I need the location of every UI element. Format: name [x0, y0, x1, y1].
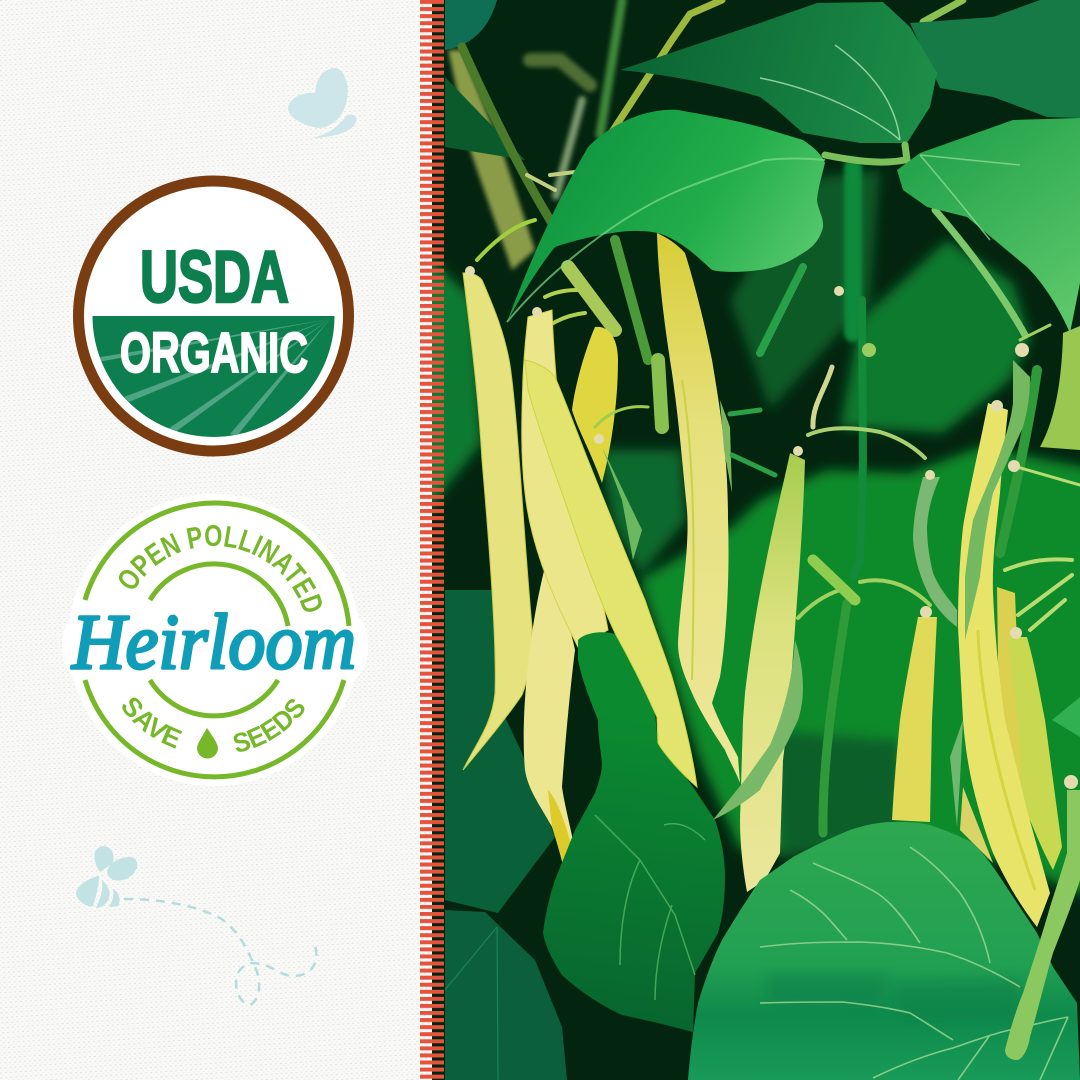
bean: back top — [572, 327, 618, 483]
pod: thin green centre — [602, 447, 642, 560]
leaf: central lower — [543, 632, 725, 1032]
tendrils and buds — [595, 325, 1080, 630]
leaf: large light centre — [507, 110, 825, 322]
mid stems — [477, 172, 1037, 833]
decorative stripe border — [420, 0, 444, 1080]
pod: thin green lower — [950, 720, 963, 827]
panel: fabric background — [0, 0, 432, 1080]
bean: lower tip shade — [548, 790, 570, 862]
leaf: dark upper left — [445, 77, 525, 160]
pod: green foreground — [1005, 790, 1080, 1060]
leaf: lower left — [445, 590, 555, 913]
bean: small far right — [1007, 637, 1062, 870]
bean: left long — [463, 273, 532, 770]
seal ring — [78, 181, 348, 451]
seal rays — [95, 319, 330, 436]
bean: small right — [892, 617, 937, 822]
bean: mid right — [740, 453, 805, 892]
flight path: dashed trail — [124, 899, 316, 1005]
blurred background stems — [530, 0, 853, 333]
leaf: top left teal — [445, 0, 497, 50]
badge rings — [85, 503, 349, 777]
bean: top right edge — [1040, 326, 1080, 450]
panel: bean plant photo — [420, 0, 1080, 1080]
pod: green upper right — [965, 360, 1030, 640]
pod: thin green upper — [720, 400, 732, 493]
leaf: right light — [897, 118, 1080, 333]
stems: upper — [462, 0, 963, 353]
badge text: Heirloom: Heirloom — [71, 598, 356, 685]
bean: behind centre — [522, 310, 608, 647]
seal text: ORGANIC: ORGANIC — [120, 321, 308, 385]
bean: front centre — [525, 360, 697, 787]
badge white backing — [62, 494, 368, 786]
badge: USDA Organic seal — [78, 181, 348, 451]
leaf: upper centre — [620, 2, 937, 143]
badge text: Seeds: SEEDS — [234, 699, 304, 752]
background foliage — [420, 170, 1080, 900]
badge text: Open Pollinated: OPEN POLLINATED — [118, 525, 322, 612]
leaf: top right — [910, 0, 1080, 118]
leaf: large front — [688, 822, 1080, 1080]
leaf: right edge small — [1052, 697, 1080, 737]
bean: back far right — [997, 587, 1030, 820]
bean: lower centre — [524, 571, 575, 862]
leaf: bottom left — [445, 910, 567, 1080]
pod: green curved right — [913, 477, 957, 627]
seal green field — [92, 316, 334, 437]
bean: back behind long — [960, 787, 993, 863]
bean: long right — [958, 403, 1050, 927]
stem bud — [862, 343, 876, 357]
icon: seed drop — [197, 728, 218, 758]
pod: green curved centre — [713, 640, 803, 820]
bean caps — [465, 266, 1078, 789]
bean: tall centre — [657, 233, 740, 783]
icon: bee — [76, 846, 137, 908]
badge text: Save: SAVE — [122, 698, 182, 749]
blurred background bean — [448, 50, 535, 270]
icon: butterfly — [288, 68, 356, 138]
seal text: USDA: USDA — [140, 237, 289, 318]
stems: leaf joints — [825, 145, 1025, 335]
badge: Open Pollinated Heirloom — [62, 494, 368, 786]
